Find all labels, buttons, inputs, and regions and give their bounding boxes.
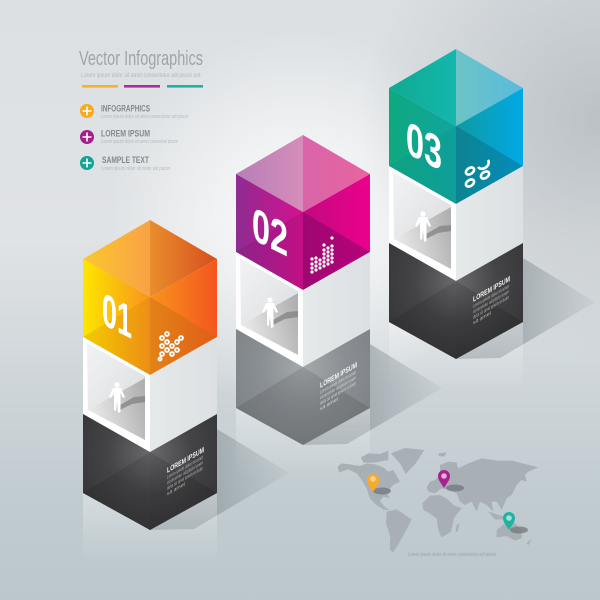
label text: dolor sit amet ipsum et dolor [320,381,356,407]
cube: bottom grey [236,329,370,445]
label text: sit amet [167,481,185,497]
label text: sit amet [473,310,491,326]
person shadow [273,311,298,325]
pin: orange [367,474,391,494]
pin: purple [438,470,464,492]
person [415,211,431,242]
label text: Lorem ipsum dolor sit amet [167,455,203,481]
legend item: lorem ipsum: LOREM IPSUM [101,128,150,138]
label text: consectetur ad piscin lorem [167,460,203,486]
label text: LOREM IPSUM [473,274,510,304]
cube: top orange [83,220,217,375]
legend item: sample text: Lorem ipsum dolor sit dolor adi piscin [101,166,170,172]
cube: bottom dark [83,414,217,530]
cube: middle window [236,252,370,367]
cube: top magenta [236,135,370,290]
colour bars [82,85,203,88]
cube: top teal [389,49,523,204]
map caption: Lorem ipsum dolor sit amet consectetur adi piscin [408,552,496,558]
icon: rings [465,160,490,188]
title block [79,48,203,88]
label text [320,360,357,412]
legend item: sample text: SAMPLE TEXT [102,155,149,165]
number 01: 01 [102,283,132,349]
label text [473,274,510,326]
column 2 [236,135,442,478]
person shadow [426,225,451,239]
column 1 [83,220,289,563]
floor shadow [150,429,289,530]
cube: bottom dark [389,243,523,359]
number 03: 03 [406,111,442,181]
person shadow [120,396,145,410]
label text: consectetur ad piscin lorem [320,375,356,401]
legend item: sample text [80,155,170,172]
legend item: infographics [80,104,188,120]
world map [338,448,538,558]
label text: consectetur ad piscin lorem [473,289,509,315]
label text: Lorem ipsum dolor sit amet [473,284,509,310]
label text: LOREM IPSUM [320,360,357,390]
label text: LOREM IPSUM [167,445,204,475]
number 02: 02 [252,197,288,267]
heading: Vector Infographics [79,48,203,70]
label text: sit amet [320,396,338,412]
reflection [83,493,217,563]
pin: teal [503,512,528,534]
legend item: lorem ipsum: Lorem ipsum dolor sit amet consectet piscin [101,139,178,145]
label text: dolor sit amet ipsum et dolor [167,466,203,492]
cube: middle window [389,166,523,281]
legend item: infographics: INFOGRAPHICS [101,104,150,114]
legend item: lorem ipsum [80,128,178,145]
legend item: infographics: Lorem ipsum dolor sit amet consectetur adi piscin [101,114,188,120]
continents [338,448,538,553]
legend [80,104,188,172]
label text: dolor sit amet ipsum et dolor [473,295,509,321]
reflection [389,322,523,392]
label text [167,445,204,497]
column 3 [389,49,595,392]
subheading: Lorem ipsum dolor sit amet consectetur adi piscin unt. [81,72,202,79]
label text: Lorem ipsum dolor sit amet [320,370,356,396]
person [109,382,125,413]
reflection [236,408,370,478]
floor shadow [303,344,442,445]
floor shadow [456,258,595,359]
person [262,297,278,328]
icon: hexagon molecule [158,332,183,360]
cube: middle window [83,337,217,452]
icon: equaliser [310,236,334,274]
